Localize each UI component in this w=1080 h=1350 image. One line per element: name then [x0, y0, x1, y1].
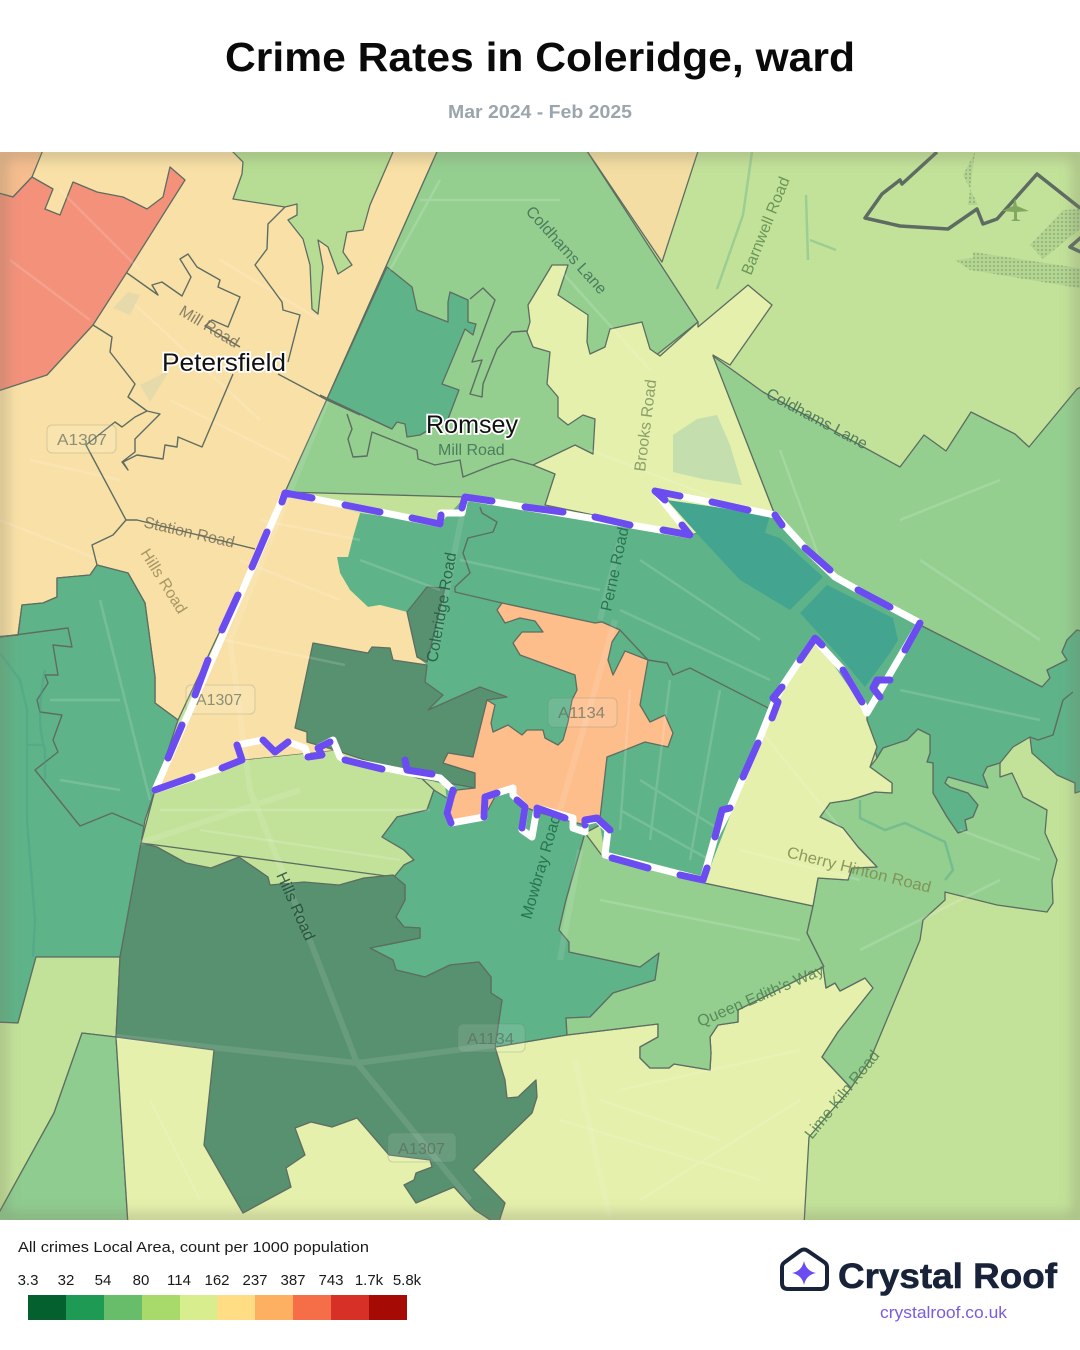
wordmark: Crystal Roof — [838, 1257, 1057, 1296]
ward outline: purple dashes — [155, 491, 920, 880]
road name labels: Station Road — [142, 514, 236, 552]
ward sub-area boundaries — [455, 507, 772, 710]
legend — [18, 1239, 422, 1320]
ward outline: white base — [155, 491, 920, 880]
road shields: A1307 — [398, 1141, 445, 1158]
road network — [0, 180, 1040, 1220]
subtitle: date range: Mar 2024 - Feb 2025 — [448, 102, 632, 122]
Romsey inner boundaries — [320, 288, 533, 477]
road name labels: Hills Road — [137, 546, 190, 617]
region: Hills Road light green — [141, 750, 434, 877]
airport boundary — [865, 152, 1080, 254]
legend title: All crimes Local Area, count per 1000 population — [18, 1239, 369, 1256]
road name labels: Mowbray Road — [519, 813, 565, 921]
legend scale values: 743 — [318, 1272, 344, 1289]
legend colour bar — [28, 1295, 407, 1320]
place label: Petersfield: Petersfield — [162, 349, 286, 377]
stippled airfield patches — [955, 152, 1080, 289]
road name labels: Barnwell Road — [739, 175, 794, 277]
region: pale south — [116, 967, 873, 1225]
road name labels: Brooks Road — [632, 379, 660, 472]
region: Romsey darker patch — [327, 267, 476, 437]
road shields: A1134 — [558, 705, 605, 722]
region: high-crime north-west — [0, 167, 185, 392]
icon: airport plane — [1002, 198, 1029, 221]
region: Mowbray green — [370, 790, 659, 1047]
road name labels: Queen Edith's Way — [695, 962, 827, 1031]
legend scale values — [18, 1272, 422, 1289]
map edge vignette — [0, 152, 1080, 1220]
region: orange high-crime centre — [443, 603, 673, 825]
legend scale values: 1.7k — [355, 1272, 384, 1289]
road name labels: Mill Road — [176, 303, 242, 352]
region: Brooks Road pale — [527, 265, 775, 535]
west inner boundary — [0, 628, 143, 826]
region: south-west mid green — [0, 1033, 128, 1225]
region: Queen Edith's and Cherry Hinton mid green — [559, 729, 1057, 1088]
road shields: A1307 — [196, 692, 242, 709]
region: east mid green — [713, 356, 1080, 687]
legend scale values: 162 — [204, 1272, 230, 1289]
region: Coleridge ward peach west — [155, 493, 427, 790]
Petersfield inner boundaries — [86, 207, 360, 565]
region: dark green centre — [295, 643, 507, 788]
legend scale values: 5.8k — [393, 1272, 422, 1289]
legend scale values: 387 — [280, 1272, 306, 1289]
road name labels: Coleridge Road — [424, 551, 460, 664]
region: teal water south — [800, 585, 898, 687]
place label: Romsey: Romsey — [426, 411, 519, 439]
region: teal water north — [667, 500, 823, 610]
QE inner boundary — [807, 906, 824, 967]
region: top-left corner — [0, 152, 43, 196]
legend scale values: 237 — [242, 1272, 268, 1289]
icon: house with star — [782, 1250, 827, 1289]
region: east green — [867, 625, 1080, 833]
logo: Crystal Roof — [782, 1250, 1057, 1322]
road shields: A1134 — [467, 1031, 514, 1048]
region: west green — [0, 565, 178, 1023]
title: Crime Rates in Coleridge, ward — [225, 34, 855, 80]
legend scale values: 114 — [167, 1272, 191, 1289]
road name labels: Coldhams Lane — [522, 203, 610, 298]
region: top peach — [588, 152, 698, 263]
grey patches — [113, 292, 170, 402]
region: north light green — [226, 145, 396, 314]
road name labels: Hills Road — [272, 870, 318, 943]
map: crime rate choropleth — [0, 145, 1080, 1225]
legend scale values: 3.3 — [18, 1272, 38, 1289]
road name labels: Cherry Hinton Road — [785, 844, 933, 897]
region: Hills Road dark green — [116, 843, 537, 1225]
region: Romsey — [285, 145, 698, 510]
road name labels — [137, 175, 933, 1143]
road shields: A1307 — [57, 432, 107, 449]
road name labels: Mill Road — [438, 442, 505, 459]
road name labels: Perne Road — [598, 526, 633, 613]
road shields — [47, 425, 617, 1162]
website link: crystalroof.co.uk — [880, 1304, 1008, 1322]
region: small dark wedge — [407, 587, 445, 662]
legend scale values: 54 — [95, 1272, 111, 1289]
region: south-west light — [0, 957, 120, 1220]
stream lines — [860, 800, 953, 880]
east inner boundary — [1030, 692, 1073, 740]
road name labels: Coldhams Lane — [763, 386, 870, 453]
lake — [673, 415, 742, 485]
legend scale values: 80 — [133, 1272, 149, 1289]
road name labels: Lime Kiln Road — [802, 1047, 883, 1143]
water channels north-east — [717, 152, 836, 289]
region: Coleridge ward green — [337, 502, 915, 876]
west water lines — [0, 653, 45, 957]
legend scale values: 32 — [58, 1272, 74, 1289]
region: Petersfield — [0, 145, 440, 720]
region: Cherry Hinton pale — [704, 638, 892, 906]
